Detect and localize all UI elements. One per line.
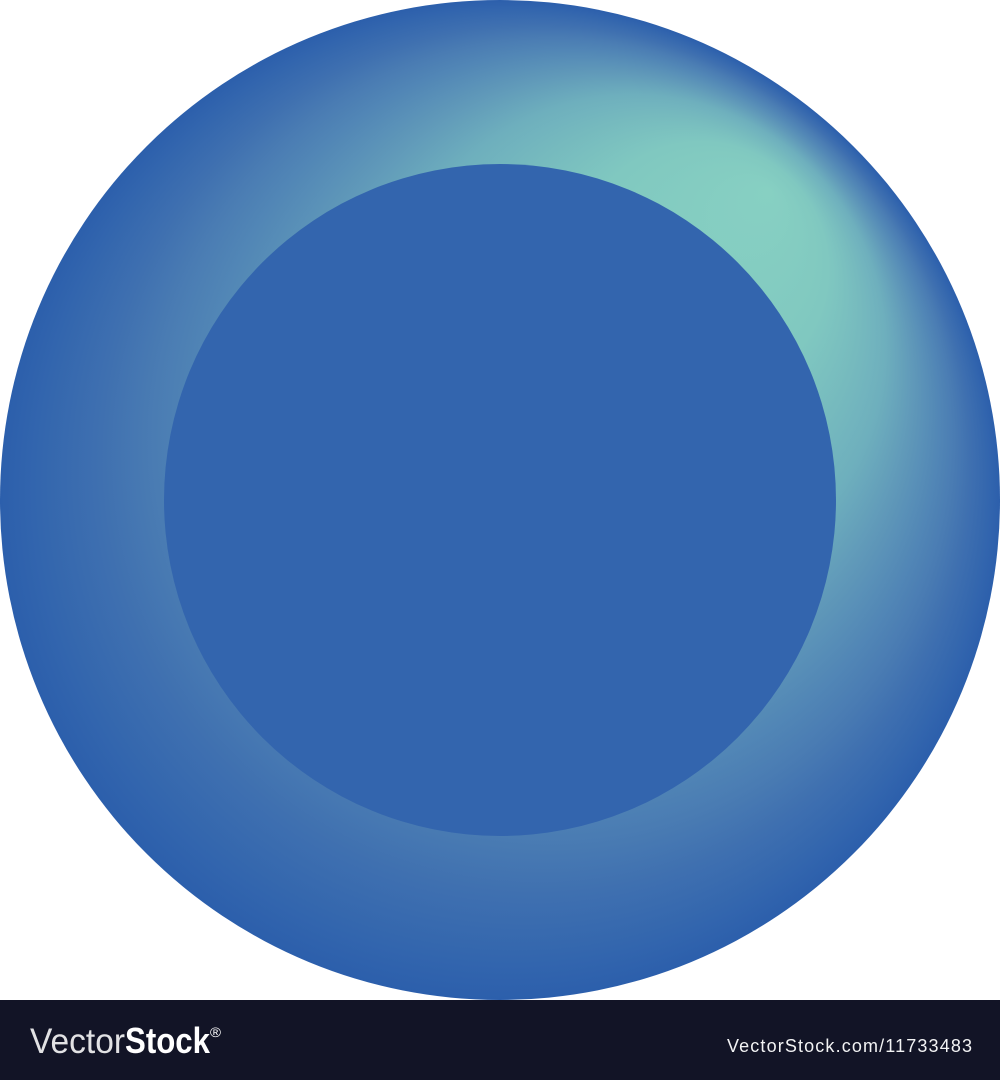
inner solid blue circle — [164, 164, 836, 836]
VectorStock logo — [30, 1020, 222, 1061]
VectorStock logo: Vector — [30, 1022, 125, 1061]
VectorStock logo: Stock — [125, 1020, 211, 1061]
footer bar — [0, 1000, 1000, 1080]
image ID text: VectorStock.com/11733483 — [727, 1036, 972, 1056]
VectorStock logo: ® — [210, 1024, 222, 1040]
